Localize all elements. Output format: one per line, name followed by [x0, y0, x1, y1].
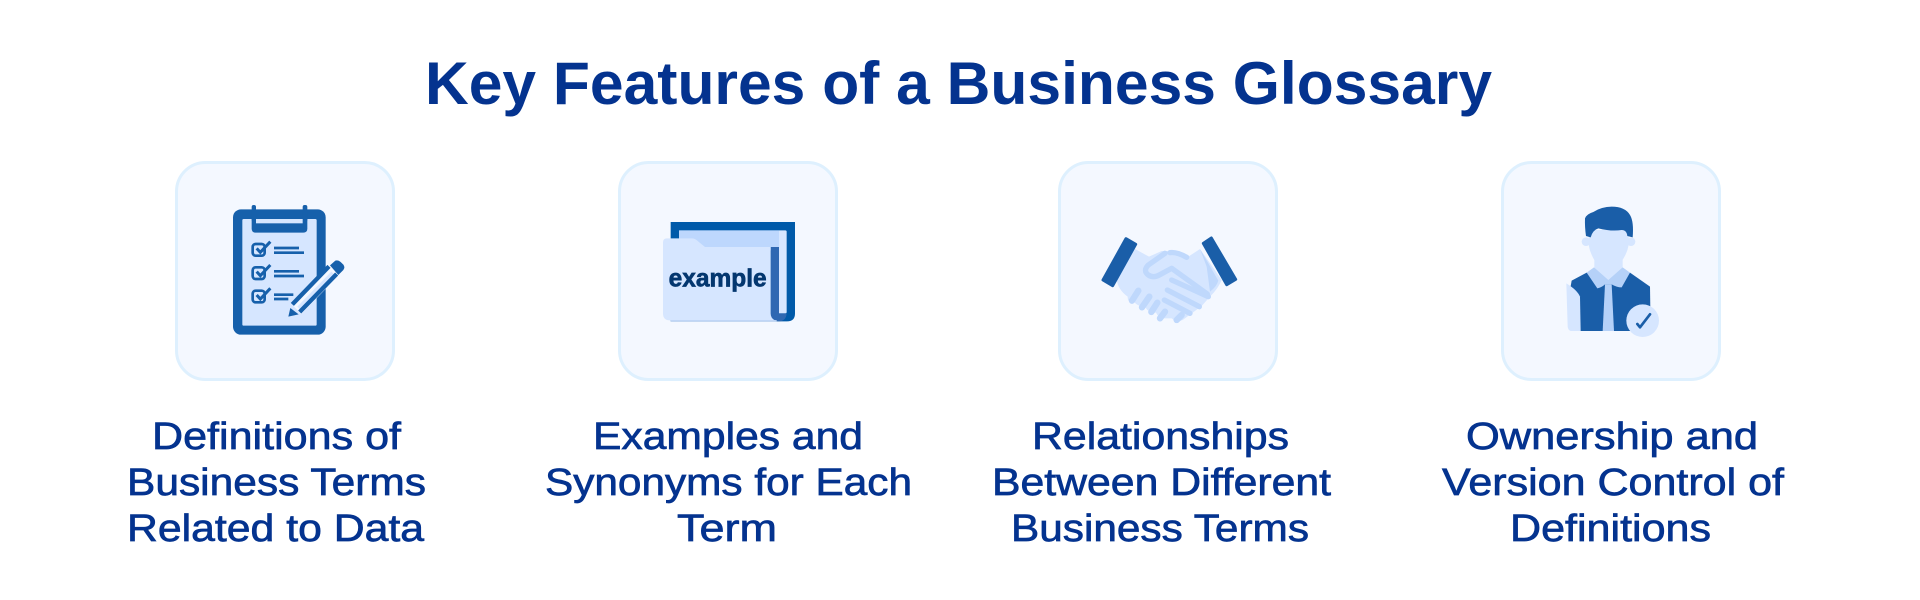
- label: ownership: Definitions: [1510, 508, 1711, 550]
- label: definitions: Definitions of: [152, 416, 401, 458]
- panel: examples: [545, 162, 912, 550]
- icon: handshake: [1103, 238, 1236, 321]
- label: examples: Synonyms for Each: [545, 462, 912, 504]
- label: relationships: Between Different: [992, 462, 1331, 504]
- card background: relationships: [1060, 162, 1276, 380]
- icon: person with check badge: [1566, 207, 1659, 337]
- label: relationships: Relationships: [1032, 416, 1289, 458]
- label: examples: Term: [677, 508, 777, 550]
- label: relationships: [992, 416, 1331, 550]
- label: definitions: [127, 416, 426, 550]
- label: definitions: Business Terms: [127, 462, 426, 504]
- icon: example folder: example: [669, 265, 767, 293]
- label: ownership: [1442, 416, 1784, 550]
- card background: examples: [620, 162, 836, 380]
- title: Key Features of a Business Glossary: [425, 50, 1493, 117]
- card background: definitions: [176, 162, 394, 380]
- panel: definitions: [127, 162, 426, 550]
- card background: ownership: [1502, 162, 1720, 380]
- label: examples: Examples and: [593, 416, 863, 458]
- icon: clipboard checklist: [233, 205, 344, 335]
- label: examples: [545, 416, 912, 550]
- label: definitions: Related to Data: [127, 508, 425, 550]
- icon: example folder: [663, 222, 795, 321]
- label: ownership: Version Control of: [1442, 462, 1784, 504]
- panel: relationships: [992, 162, 1331, 550]
- label: relationships: Business Terms: [1011, 508, 1309, 550]
- label: ownership: Ownership and: [1466, 416, 1758, 458]
- panel: ownership: [1442, 162, 1784, 550]
